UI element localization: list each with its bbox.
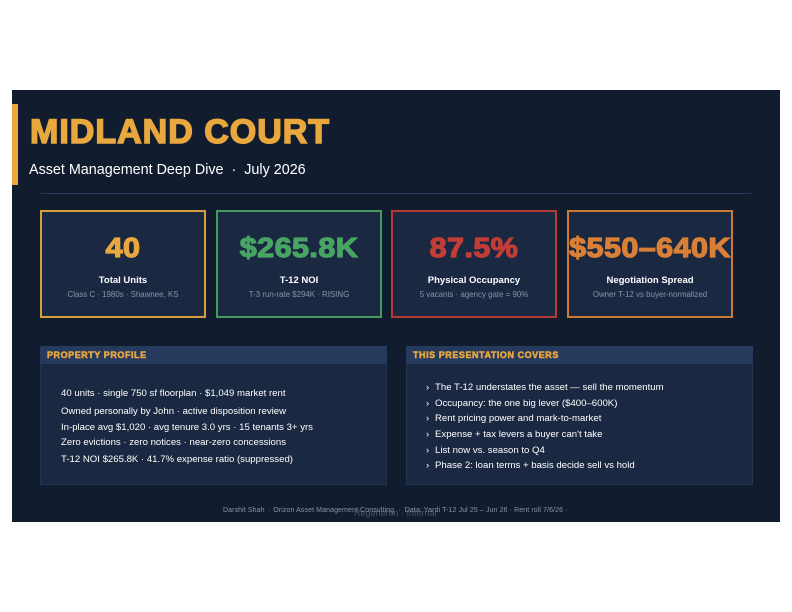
agenda list: ›	[426, 460, 429, 471]
KPI card: NOI	[216, 210, 382, 318]
detail: T-3 run-rate $294K · RISING	[249, 290, 349, 299]
slide background	[12, 90, 780, 522]
agenda list: Rent pricing power and mark-to-market	[435, 413, 601, 424]
accent bar	[12, 104, 18, 185]
KPI card: occupancy	[391, 210, 557, 318]
panel heading: PROPERTY PROFILE	[47, 350, 147, 360]
label: Total Units	[99, 275, 147, 286]
KPI card: total units	[40, 210, 206, 318]
agenda list: List now vs. season to Q4	[435, 445, 545, 456]
title: MIDLAND COURT	[30, 113, 330, 151]
panel: this presentation covers	[406, 346, 753, 485]
agenda list	[426, 382, 664, 471]
value: $550–640K	[569, 232, 731, 263]
profile lines: T-12 NOI $265.8K · 41.7% expense ratio (suppressed)	[61, 454, 293, 465]
profile lines	[61, 388, 313, 465]
agenda list: ›	[426, 429, 429, 440]
label: T-12 NOI	[280, 275, 318, 286]
panel heading: THIS PRESENTATION COVERS	[413, 350, 559, 360]
footer watermark: Regeneron · Internal	[354, 508, 437, 518]
detail: Owner T-12 vs buyer-normalized	[593, 290, 707, 299]
agenda list: ›	[426, 398, 429, 409]
profile lines: Owned personally by John · active disposition review	[61, 406, 286, 417]
detail: 5 vacants · agency gate = 90%	[420, 290, 528, 299]
detail: Class C · 1980s · Shawnee, KS	[68, 290, 178, 299]
label: Physical Occupancy	[428, 275, 520, 286]
agenda list: ›	[426, 413, 429, 424]
label: Negotiation Spread	[606, 275, 694, 286]
subtitle: Asset Management Deep Dive · July 2026	[29, 162, 306, 178]
panel: property profile	[40, 346, 387, 485]
agenda list: ›	[426, 445, 429, 456]
agenda list: ›	[426, 382, 429, 393]
KPI card: negotiation spread	[567, 210, 733, 318]
profile lines: 40 units · single 750 sf floorplan · $1,049 market rent	[61, 388, 286, 399]
agenda list: Expense + tax levers a buyer can't take	[435, 429, 602, 440]
value: $265.8K	[240, 232, 358, 263]
profile lines: In-place avg $1,020 · avg tenure 3.0 yrs · 15 tenants 3+ yrs	[61, 422, 313, 433]
panel heading	[406, 346, 753, 364]
agenda list: Occupancy: the one big lever ($400–600K)	[435, 398, 617, 409]
value: 40	[106, 232, 140, 263]
profile lines: Zero evictions · zero notices · near-zero concessions	[61, 437, 286, 448]
header divider	[41, 193, 751, 194]
agenda list: The T-12 understates the asset — sell the momentum	[435, 382, 664, 393]
footer source line: Darshit Shah · Orizon Asset Management Consulting · Data: Yardi T-12 Jul 25 – Jun 26 · Rent roll 7/6/26 ·	[223, 507, 568, 514]
value: 87.5%	[430, 232, 518, 263]
agenda list: Phase 2: loan terms + basis decide sell vs hold	[435, 460, 635, 471]
panel heading	[40, 346, 387, 364]
